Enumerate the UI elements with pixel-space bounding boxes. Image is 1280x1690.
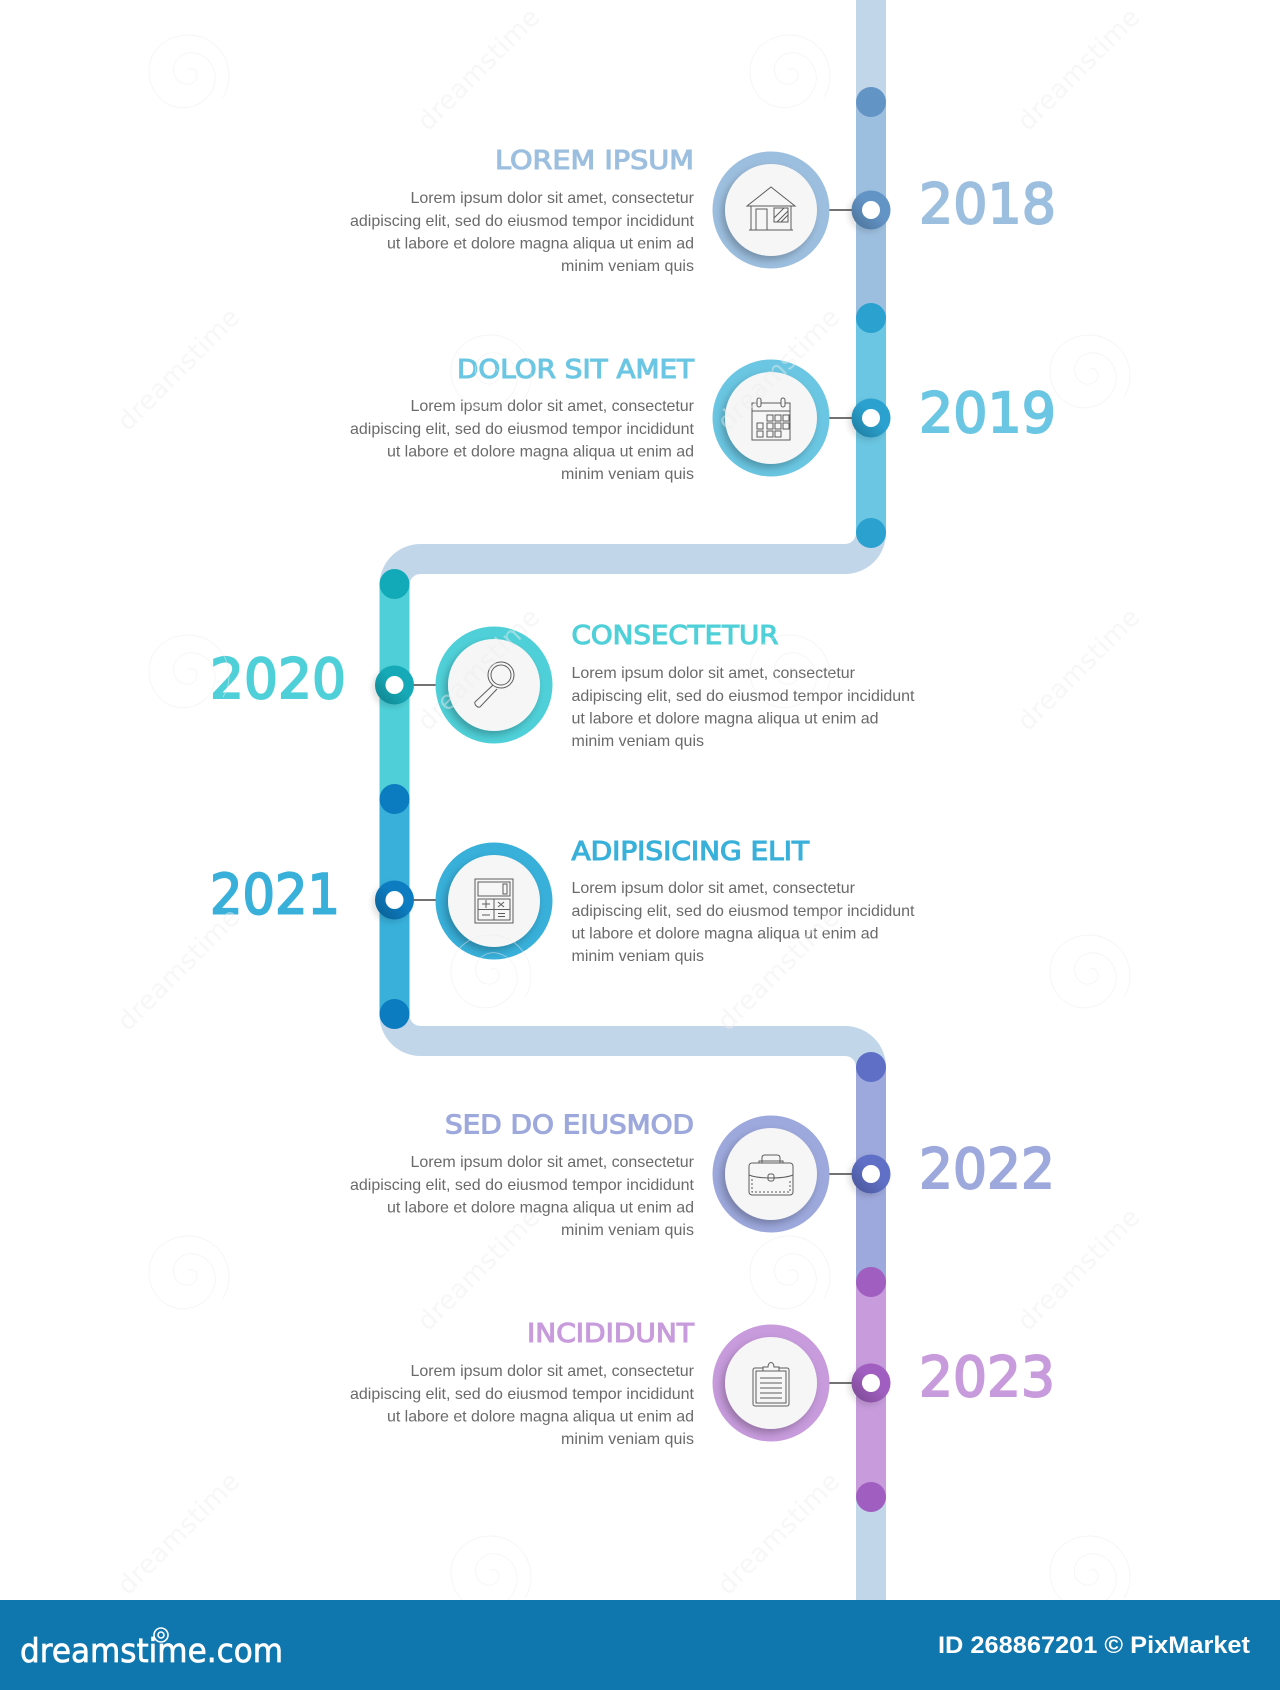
body text: adipiscing elit, sed do eiusmod tempor incididunt xyxy=(572,688,915,705)
watermark pattern: dreamstime xyxy=(112,1467,246,1601)
icon: house xyxy=(747,187,795,230)
node xyxy=(852,1154,890,1194)
panel: 2021 adipisicing elit xyxy=(210,837,915,965)
watermark pattern: dreamstime xyxy=(412,603,546,737)
node xyxy=(852,398,890,438)
footer logo: dreamstime.com xyxy=(20,1631,283,1670)
segment 2021 xyxy=(380,784,410,1029)
icon circle xyxy=(712,360,830,476)
heading: SED DO EIUSMOD xyxy=(445,1110,694,1140)
body text: minim veniam quis xyxy=(561,466,694,483)
connector xyxy=(829,417,860,419)
body text: Lorem ipsum dolor sit amet, consectetur xyxy=(572,880,856,897)
body text: Lorem ipsum dolor sit amet, consectetur xyxy=(410,1363,695,1380)
icon: briefcase xyxy=(749,1155,793,1195)
body text: minim veniam quis xyxy=(572,733,704,750)
watermark pattern xyxy=(112,3,1146,1609)
watermark pattern: dreamstime xyxy=(1012,1203,1146,1337)
connector xyxy=(829,1173,860,1175)
body text: Lorem ipsum dolor sit amet, consectetur xyxy=(572,665,856,682)
panel: 2022 sed do eiusmod xyxy=(350,1110,1055,1239)
segment 2018 xyxy=(856,87,886,318)
watermark pattern: dreamstime xyxy=(412,1203,546,1337)
icon: magnifier xyxy=(475,662,514,707)
icon circle xyxy=(712,1324,830,1442)
icon circle xyxy=(712,1116,830,1232)
connector xyxy=(406,899,436,901)
body text: adipiscing elit, sed do eiusmod tempor incididunt xyxy=(350,421,695,438)
segment 2019 xyxy=(856,303,886,548)
heading: CONSECTETUR xyxy=(572,621,778,651)
body text: adipiscing elit, sed do eiusmod tempor incididunt xyxy=(350,213,695,230)
image credit: ID 268867201 © PixMarket xyxy=(938,1632,1250,1659)
footer bar xyxy=(0,1600,1280,1690)
watermark pattern: dreamstime xyxy=(412,3,546,137)
segment 2023 xyxy=(856,1267,886,1512)
watermark pattern: dreamstime xyxy=(712,1467,846,1601)
body text: adipiscing elit, sed do eiusmod tempor incididunt xyxy=(572,903,915,920)
body text: Lorem ipsum dolor sit amet, consectetur xyxy=(410,398,695,415)
heading: DOLOR SIT AMET xyxy=(457,355,694,385)
segment 2020 xyxy=(380,569,410,799)
connector xyxy=(829,209,860,211)
icon circle xyxy=(712,152,830,268)
body text: Lorem ipsum dolor sit amet, consectetur xyxy=(410,190,695,207)
watermark pattern: dreamstime xyxy=(112,303,246,437)
node xyxy=(375,880,414,920)
body text: ut labore et dolore magna aliqua ut enim ad xyxy=(387,236,694,252)
year: 2020 xyxy=(210,647,346,711)
connector xyxy=(829,1382,860,1384)
timeline base path xyxy=(394,0,871,1600)
body text: minim veniam quis xyxy=(561,1222,694,1239)
heading: LOREM IPSUM xyxy=(495,146,694,176)
icon: calendar xyxy=(752,398,790,440)
node xyxy=(852,1364,890,1402)
body text: ut labore et dolore magna aliqua ut enim ad xyxy=(572,710,878,728)
watermark pattern: dreamstime xyxy=(712,903,846,1037)
year: 2023 xyxy=(919,1345,1055,1409)
year: 2018 xyxy=(919,172,1056,236)
body text: minim veniam quis xyxy=(572,948,704,965)
body text: ut labore et dolore magna aliqua ut enim ad xyxy=(387,1200,694,1216)
body text xyxy=(350,1363,695,1448)
body text: adipiscing elit, sed do eiusmod tempor incididunt xyxy=(350,1386,695,1403)
icon: clipboard xyxy=(753,1362,789,1406)
body text: ut labore et dolore magna aliqua ut enim ad xyxy=(572,926,878,942)
year: 2021 xyxy=(210,862,340,926)
body text: minim veniam quis xyxy=(561,258,694,275)
body text xyxy=(350,1154,695,1239)
icon: logo spiral xyxy=(154,1628,168,1642)
heading: INCIDIDUNT xyxy=(527,1319,694,1349)
body text: adipiscing elit, sed do eiusmod tempor incididunt xyxy=(350,1177,695,1194)
body text: Lorem ipsum dolor sit amet, consectetur xyxy=(410,1154,695,1171)
body text: minim veniam quis xyxy=(561,1431,694,1448)
body text xyxy=(350,190,695,275)
icon: calculator xyxy=(475,879,513,923)
connector xyxy=(406,684,436,686)
watermark pattern: dreamstime xyxy=(1012,3,1146,137)
node xyxy=(852,190,890,230)
body text: ut labore et dolore magna aliqua ut enim ad xyxy=(387,444,694,460)
panel: 2019 dolor sit amet xyxy=(350,355,1056,483)
watermark pattern: dreamstime xyxy=(1012,603,1146,737)
panel: 2018 lorem ipsum xyxy=(350,146,1056,275)
icon circle xyxy=(436,842,552,960)
node xyxy=(375,666,414,704)
panel: 2020 consectetur xyxy=(210,621,915,750)
body text xyxy=(350,398,695,483)
body text: ut labore et dolore magna aliqua ut enim ad xyxy=(387,1408,694,1426)
segment 2022 xyxy=(856,1052,886,1282)
watermark pattern: dreamstime xyxy=(112,903,246,1037)
year: 2022 xyxy=(919,1137,1055,1201)
watermark pattern: dreamstime xyxy=(712,303,846,437)
icon circle xyxy=(436,626,552,744)
body text xyxy=(572,665,915,750)
year: 2019 xyxy=(919,381,1056,445)
body text xyxy=(572,880,915,965)
heading: ADIPISICING ELIT xyxy=(572,837,809,867)
panel: 2023 incididunt xyxy=(350,1319,1055,1448)
